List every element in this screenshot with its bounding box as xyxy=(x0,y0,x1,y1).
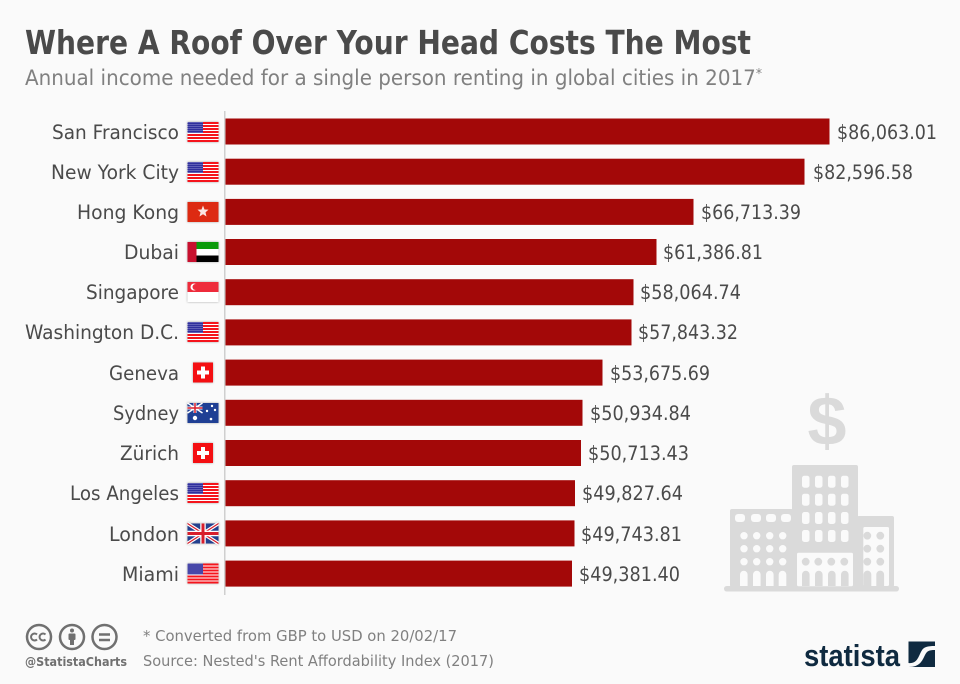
row: London: London xyxy=(109,523,179,546)
row: Zürich xyxy=(120,440,689,466)
row: Washington D.C.: $57,843.32 xyxy=(638,321,738,344)
row: Miami: $49,381.40 xyxy=(579,563,680,586)
bar chart xyxy=(25,118,937,587)
row: Miami: Miami xyxy=(122,563,179,586)
row: Hong Kong: Hong Kong xyxy=(77,201,179,224)
row: Sydney: Sydney xyxy=(113,402,179,425)
icon: logo mark xyxy=(908,642,935,667)
row: Geneva: $53,675.69 xyxy=(610,362,710,385)
row: Hong Kong: $66,713.39 xyxy=(701,201,801,224)
icon: Singapore flag xyxy=(188,282,218,302)
row: Los Angeles xyxy=(70,480,683,506)
row: Zürich: Zürich xyxy=(120,442,179,465)
icon: Swiss flag xyxy=(193,443,213,463)
row: Dubai xyxy=(124,239,763,265)
statista logo: statista xyxy=(804,638,901,673)
row: Washington D.C. xyxy=(25,319,738,345)
row: London xyxy=(109,520,682,546)
row: Geneva xyxy=(109,360,710,386)
row: Sydney: $50,934.84 xyxy=(590,402,691,425)
icon: creative commons licence xyxy=(27,625,116,649)
row: San Francisco xyxy=(52,118,937,144)
handle: @StatistaCharts xyxy=(25,655,127,669)
footnote: * Converted from GBP to USD on 20/02/17 xyxy=(143,627,457,645)
row: Singapore: Singapore xyxy=(86,281,179,304)
row: San Francisco: San Francisco xyxy=(52,121,179,144)
row: Singapore xyxy=(86,279,741,305)
row: Miami xyxy=(122,561,680,587)
icon: US flag xyxy=(188,564,218,584)
subtitle: Annual income needed for a single person renting in global cities in 2017 xyxy=(25,66,796,90)
row: Hong Kong xyxy=(77,199,801,225)
source: Source: Nested's Rent Affordability Index (2017) xyxy=(143,652,494,670)
icon: UAE flag xyxy=(188,242,218,262)
row: Los Angeles: $49,827.64 xyxy=(582,482,683,505)
chart axis xyxy=(224,111,226,595)
subtitle: * xyxy=(756,67,762,82)
row: Washington D.C.: Washington D.C. xyxy=(25,321,179,344)
icon: US flag xyxy=(188,162,218,182)
row: New York City xyxy=(51,159,913,185)
row: Los Angeles: Los Angeles xyxy=(70,482,179,505)
title: Where A Roof Over Your Head Costs The Most xyxy=(25,23,751,62)
row: Singapore: $58,064.74 xyxy=(640,281,741,304)
row: Sydney xyxy=(113,400,691,426)
icon: Hong Kong flag xyxy=(188,202,218,222)
row: London: $49,743.81 xyxy=(581,523,682,546)
icon: US flag xyxy=(188,322,218,342)
icon: Australia flag xyxy=(188,403,218,423)
row: New York City: New York City xyxy=(51,161,179,184)
row: Dubai: Dubai xyxy=(124,241,179,264)
row: Zürich: $50,713.43 xyxy=(588,442,689,465)
dollar sign: $ xyxy=(808,382,846,460)
row: San Francisco: $86,063.01 xyxy=(837,121,937,144)
row: Geneva: Geneva xyxy=(109,362,179,385)
icon: UK flag xyxy=(188,524,218,544)
row: Dubai: $61,386.81 xyxy=(663,241,763,264)
icon: buildings with dollar sign xyxy=(724,382,899,592)
icon: US flag xyxy=(188,483,218,503)
icon: Swiss flag xyxy=(193,362,213,382)
icon: US flag xyxy=(188,122,218,142)
row: New York City: $82,596.58 xyxy=(813,161,913,184)
